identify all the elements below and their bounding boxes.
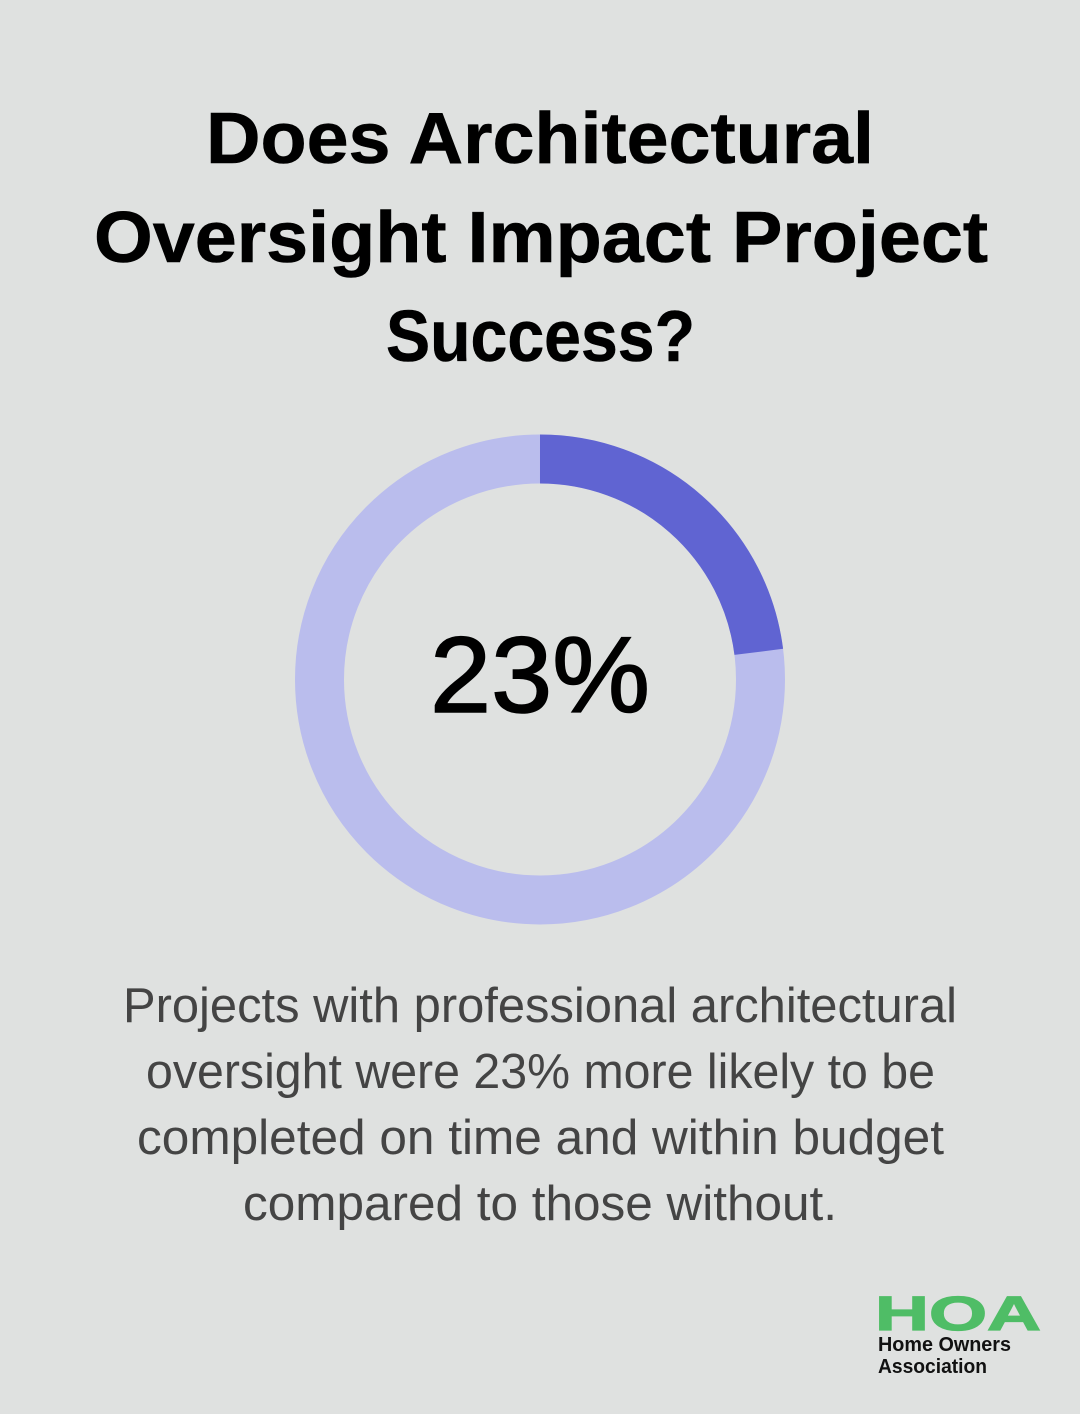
logo wordmark: HOA — [875, 1288, 1041, 1341]
logo subtitle: Home Owners — [878, 1334, 1011, 1356]
description text: oversight were 23% more likely to be — [146, 1045, 935, 1099]
title: Does Architectural — [206, 99, 874, 179]
donut chart: 23% — [320, 459, 760, 900]
description text: Projects with professional architectural — [123, 979, 957, 1033]
description text: compared to those without. — [243, 1177, 837, 1231]
title: Success? — [386, 297, 695, 377]
title: Oversight Impact Project — [94, 198, 988, 278]
donut track — [320, 459, 760, 900]
description text: completed on time and within budget — [137, 1111, 944, 1165]
logo subtitle — [878, 1334, 1011, 1378]
donut highlighted segment — [540, 459, 759, 652]
center value: 23% — [430, 614, 650, 735]
logo subtitle: Association — [878, 1356, 987, 1378]
logo: HOA Home Owners Association — [875, 1288, 1041, 1378]
description text — [123, 979, 957, 1231]
title — [94, 99, 988, 377]
